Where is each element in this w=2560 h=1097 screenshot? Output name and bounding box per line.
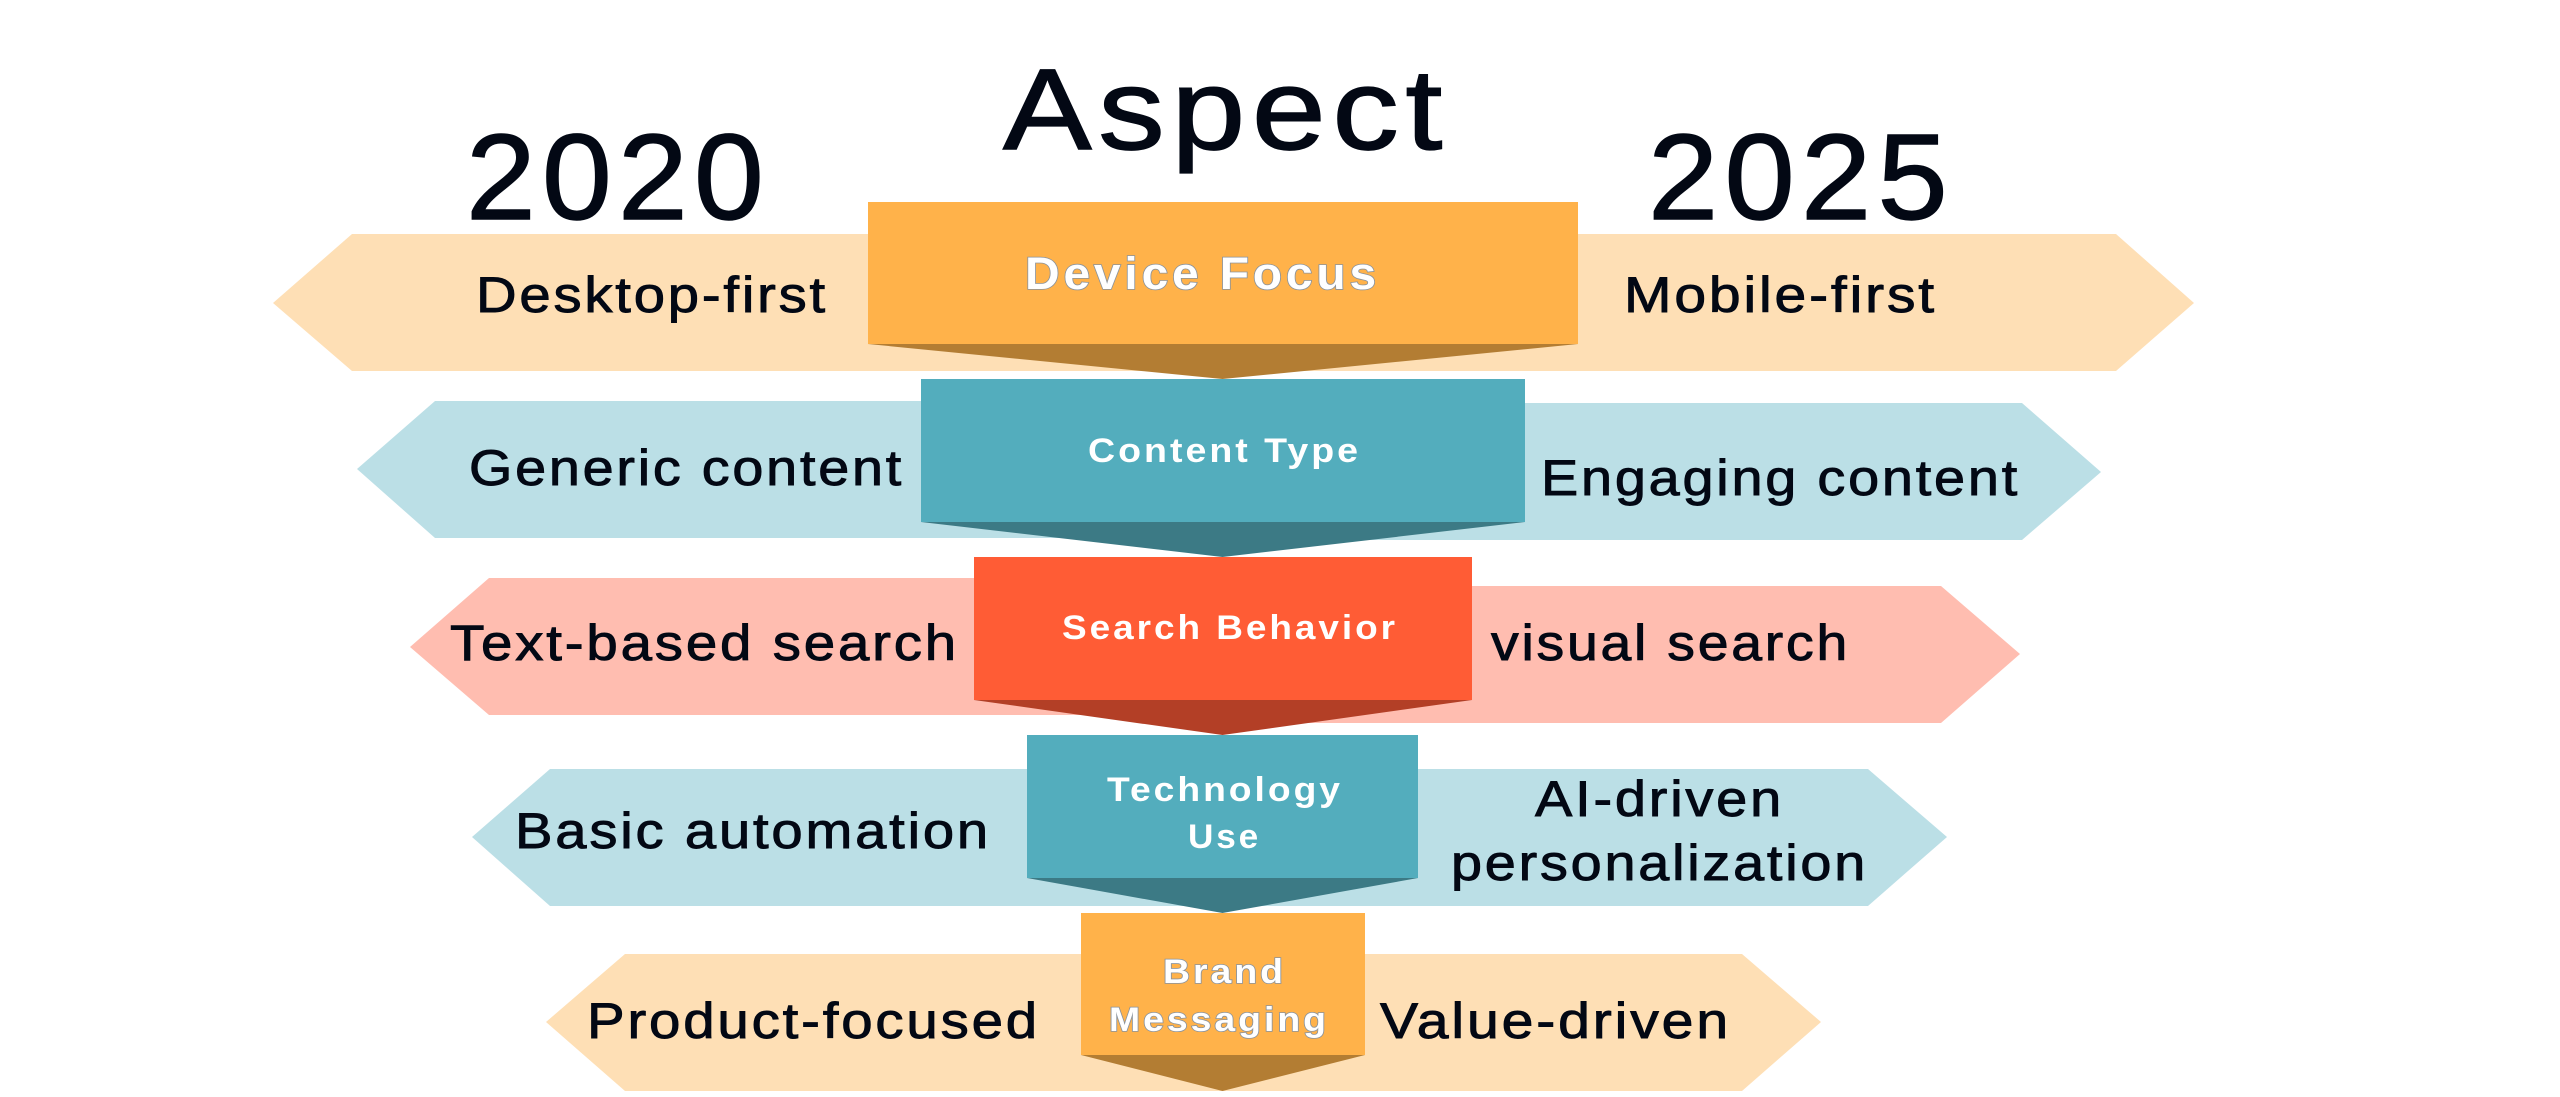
text: Product-focused: Product-focused xyxy=(587,993,1040,1049)
text: Desktop-first: Desktop-first xyxy=(476,267,828,323)
row: Brand Messaging xyxy=(546,913,1821,1091)
label: Brand Messaging: Brand xyxy=(1163,953,1286,991)
box fold: device focus xyxy=(868,344,1578,379)
arrow: 2020 device focus xyxy=(273,234,1223,371)
box fold: search behavior xyxy=(974,700,1472,735)
box fold: content type xyxy=(921,522,1525,557)
arrow: 2020 content type xyxy=(357,401,1223,538)
arrow: 2020 technology use xyxy=(472,769,1223,906)
arrow: 2025 search behavior xyxy=(1222,586,2020,723)
label: Device Focus: Device Focus xyxy=(1025,248,1380,299)
label: Brand Messaging xyxy=(1109,953,1329,1039)
arrow: 2025 brand messaging xyxy=(1222,954,1821,1091)
text: Value-driven: Value-driven xyxy=(1380,993,1731,1049)
arrow: 2020 brand messaging xyxy=(546,954,1223,1091)
text: AI-driven personalization: personalization xyxy=(1451,835,1868,891)
box: technology use xyxy=(1027,735,1418,878)
row: Content Type xyxy=(357,379,2101,557)
box: search behavior xyxy=(974,557,1472,700)
box fold: brand messaging xyxy=(1081,1055,1365,1091)
label: Technology Use: Technology xyxy=(1107,771,1343,809)
box: content type xyxy=(921,379,1525,522)
text: visual search: visual search xyxy=(1491,615,1850,671)
text: AI-driven personalization xyxy=(1451,771,1868,891)
label: Search Behavior: Search Behavior xyxy=(1062,609,1398,647)
text: Text-based search: Text-based search xyxy=(450,615,959,671)
box: brand messaging xyxy=(1081,913,1365,1055)
arrow: 2020 search behavior xyxy=(410,578,1223,715)
text: AI-driven personalization: AI-driven xyxy=(1535,771,1784,827)
arrow: 2025 device focus xyxy=(1222,234,2194,371)
text: Basic automation: Basic automation xyxy=(515,803,991,859)
title: Aspect: Aspect xyxy=(1003,46,1449,174)
label: Content Type: Content Type xyxy=(1088,432,1361,470)
arrow: 2025 technology use xyxy=(1222,769,1947,906)
heading: 2020: 2020 xyxy=(466,109,770,245)
box fold: technology use xyxy=(1027,878,1418,913)
row: Search Behavior xyxy=(410,557,2020,735)
label: Brand Messaging: Messaging xyxy=(1109,1001,1329,1039)
arrow: 2025 content type xyxy=(1222,403,2101,540)
text: Engaging content: Engaging content xyxy=(1541,450,2020,506)
row: Device Focus xyxy=(273,202,2194,379)
label: Technology Use xyxy=(1107,771,1343,856)
text: Mobile-first: Mobile-first xyxy=(1624,267,1937,323)
text: Generic content: Generic content xyxy=(469,440,904,496)
label: Technology Use: Use xyxy=(1188,818,1261,856)
row: Technology Use xyxy=(472,735,1947,913)
box: device focus xyxy=(868,202,1578,344)
heading: 2025: 2025 xyxy=(1648,109,1954,245)
